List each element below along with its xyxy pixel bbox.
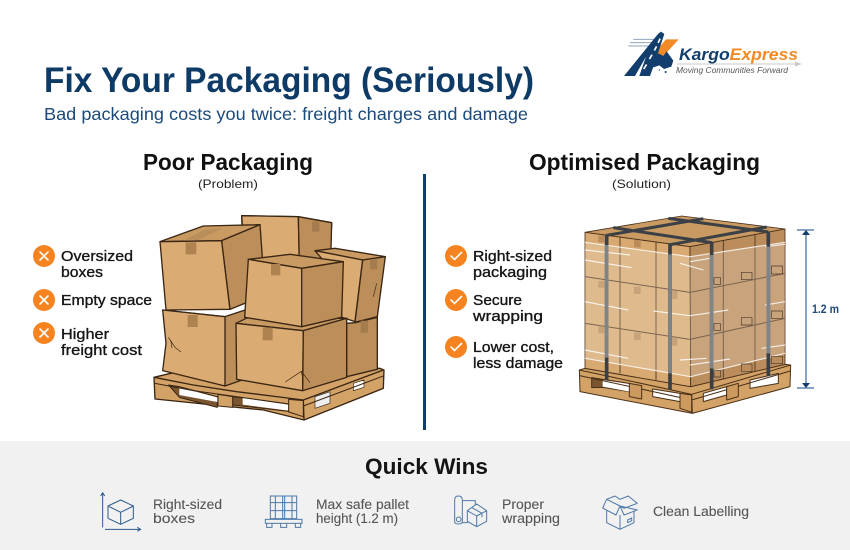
box seams xyxy=(585,234,785,380)
logo wordmark: KargoExpress xyxy=(679,45,798,64)
box: right upper xyxy=(315,248,385,322)
illustration: wrapped pallet xyxy=(579,216,791,413)
icon: cross xyxy=(33,289,55,311)
title: Fix Your Packaging (Seriously) xyxy=(44,61,534,100)
left face xyxy=(585,232,691,387)
text: max safe pallet height xyxy=(316,497,409,526)
illustration: messy pallet of boxes xyxy=(154,216,385,420)
heading: Optimised Packaging: Optimised Packaging xyxy=(529,149,760,175)
straps xyxy=(607,218,768,390)
problem list xyxy=(33,245,152,359)
heading: Poor Packaging: Poor Packaging xyxy=(143,149,313,175)
subheading: Solution: (Solution) xyxy=(612,177,671,191)
divider xyxy=(423,174,426,430)
text: proper wrapping xyxy=(501,497,560,526)
dimension: 1.2 m height xyxy=(797,230,839,388)
text: right-sized boxes xyxy=(153,497,222,526)
text: right-sized packaging: packaging xyxy=(473,264,547,281)
icon: check xyxy=(445,289,467,311)
box: back xyxy=(242,216,332,263)
icon: check xyxy=(445,336,467,358)
label: 1.2 m: 1.2 m xyxy=(812,304,839,316)
text: lower cost less damage xyxy=(473,339,563,372)
pallet xyxy=(579,364,791,413)
text: right-sized boxes: Right-sized xyxy=(153,497,222,512)
box: front upper xyxy=(245,254,343,327)
text: right-sized boxes: boxes xyxy=(153,511,195,526)
pallet xyxy=(154,368,384,420)
logo: KargoExpress xyxy=(624,32,802,76)
icon: check xyxy=(445,245,467,267)
right face xyxy=(690,229,785,387)
wrap film xyxy=(585,242,785,377)
text: lower cost less damage: Lower cost, xyxy=(473,339,554,356)
text: secure wrapping: wrapping xyxy=(472,308,543,325)
text: lower cost less damage: less damage xyxy=(473,355,563,372)
text: empty space: Empty space xyxy=(61,292,152,309)
icon: cross xyxy=(33,322,55,344)
icon: cross xyxy=(33,245,55,267)
text: proper wrapping: Proper xyxy=(502,497,545,512)
straps under film xyxy=(607,245,768,373)
icon: right-sized box xyxy=(101,493,141,531)
text: oversized boxes: Oversized xyxy=(61,248,133,265)
text: right-sized packaging: Right-sized xyxy=(473,248,552,265)
text: max safe pallet height: Max safe pallet xyxy=(316,497,409,512)
subheading: Problem: (Problem) xyxy=(198,177,258,191)
film highlights xyxy=(585,242,785,377)
box: left upper xyxy=(160,225,265,310)
text: higher freight cost: Higher xyxy=(61,326,109,343)
text: clean labelling: Clean Labelling xyxy=(653,504,749,519)
icon: pallet height xyxy=(265,496,302,527)
box: left lower xyxy=(163,308,252,386)
icon: open box xyxy=(603,496,637,529)
text: oversized boxes xyxy=(61,248,133,281)
top face xyxy=(585,216,785,247)
solution list xyxy=(445,245,563,372)
box: right lower xyxy=(347,317,377,377)
text: higher freight cost xyxy=(61,326,143,359)
box: front lower xyxy=(236,317,347,391)
panel: quick wins xyxy=(0,441,850,550)
tape marks xyxy=(598,236,677,346)
logo tagline: Moving Communities Forward xyxy=(676,66,789,75)
text: secure wrapping: Secure xyxy=(473,292,522,309)
text: max safe pallet height: height (1.2 m) xyxy=(316,511,398,526)
subtitle: Bad packaging costs you twice: freight charges and damage xyxy=(44,104,528,124)
carton marks xyxy=(714,266,783,377)
text: higher freight cost: freight cost xyxy=(61,342,143,359)
icon: wrapping roll and box xyxy=(455,496,487,527)
heading: quick wins: Quick Wins xyxy=(365,454,488,479)
text: right-sized packaging xyxy=(473,248,552,281)
text: oversized boxes: boxes xyxy=(61,264,103,281)
text: proper wrapping: wrapping xyxy=(501,511,560,526)
text: secure wrapping xyxy=(472,292,543,325)
